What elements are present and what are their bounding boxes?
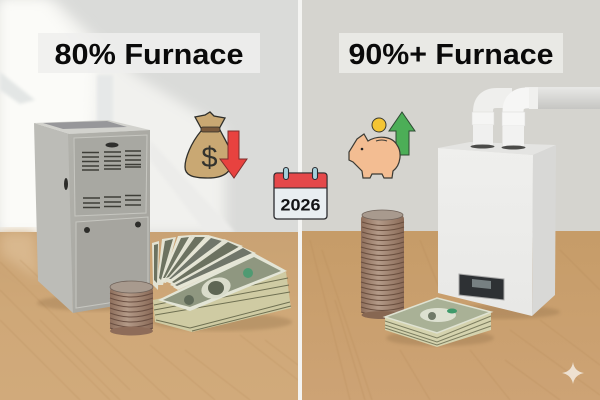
furnace: 80% unit [34, 120, 153, 313]
boiler side face [532, 145, 556, 316]
cash pile: large fanned bills [152, 235, 292, 332]
boiler front face [438, 148, 533, 316]
furnace upper door [74, 135, 147, 216]
heading: 90%+ Furnace: 90%+ Furnace [348, 39, 554, 71]
front bill [158, 253, 287, 311]
front pipe [513, 98, 538, 147]
left wooden table [0, 232, 298, 400]
right wall background [302, 0, 600, 232]
sparkle watermark [562, 362, 584, 384]
bag body [185, 130, 232, 178]
boiler: 90%+ unit [438, 87, 600, 319]
rear pipe [483, 98, 512, 147]
heading: 80% Furnace [38, 33, 260, 73]
furnace lower door [76, 217, 148, 308]
heading: 80% Furnace: 80% Furnace [54, 39, 244, 71]
horizontal pipe [525, 87, 600, 109]
control panel [459, 274, 504, 300]
cash pile: small stack [385, 298, 494, 347]
pig body [349, 134, 400, 178]
green up arrow [389, 112, 415, 155]
red down arrow [220, 131, 247, 178]
coin stack: left small [110, 281, 153, 336]
furnace top [34, 120, 150, 134]
divider [298, 0, 302, 400]
furnace louvers [82, 151, 141, 208]
icon: calendar 2026: 2026 [280, 196, 320, 214]
furnace side panel [34, 123, 73, 313]
coin [372, 118, 386, 132]
fanned bills [152, 241, 159, 290]
heading: 90%+ Furnace [339, 33, 563, 73]
right wooden table [302, 231, 600, 400]
icon: calendar 2026 [274, 168, 327, 219]
icon: piggy bank with up arrow [349, 112, 415, 178]
bag neck [195, 112, 225, 129]
stacked bills base [153, 272, 291, 332]
coin stack: right tall [361, 210, 404, 319]
furnace front [68, 130, 150, 313]
dollar sign: $ [201, 142, 218, 174]
boiler top [438, 142, 556, 155]
icon: money bag with down arrow [185, 112, 247, 178]
left wall background [0, 0, 298, 233]
